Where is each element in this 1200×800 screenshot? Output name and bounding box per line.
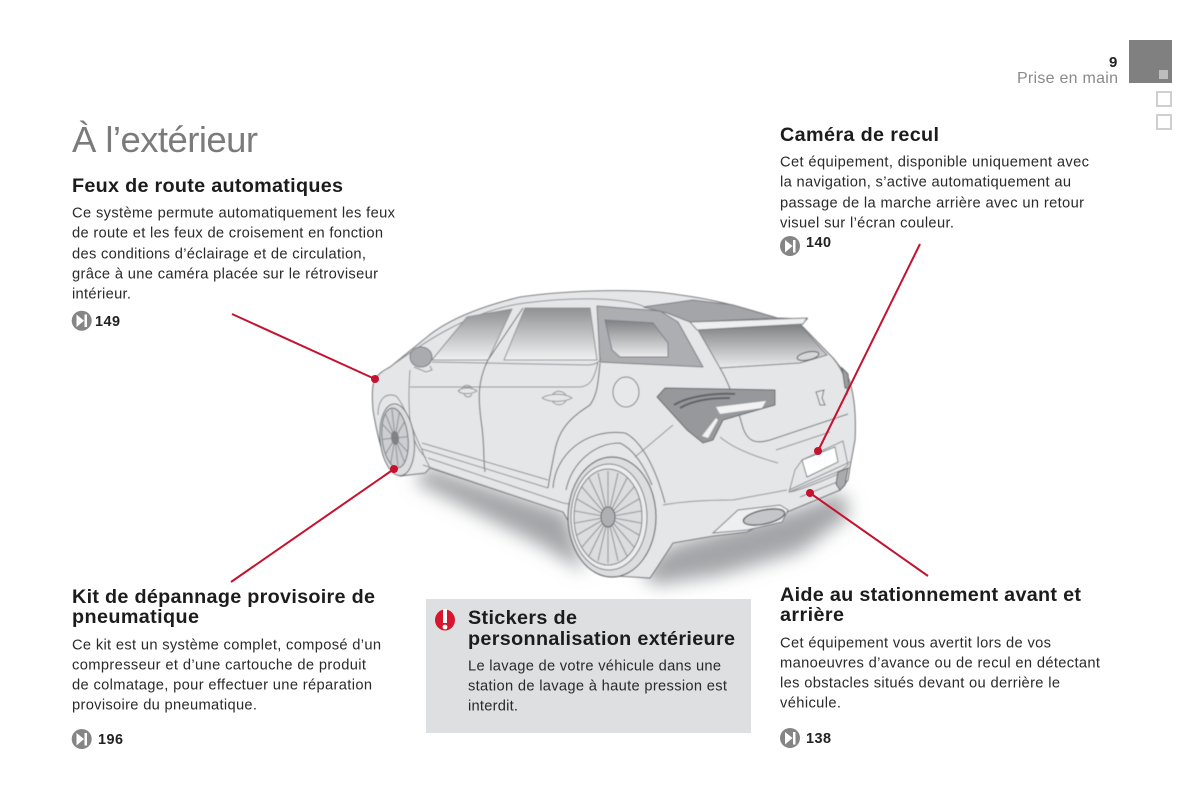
page reference 149: 149 bbox=[95, 314, 120, 330]
text block: Caméra de recul bbox=[780, 124, 1089, 232]
panel: stickers warning: personnalisation extérieure bbox=[468, 628, 735, 650]
callout line: front tyre bbox=[231, 465, 398, 582]
text block: Kit de dépannage: provisoire du pneumatique. bbox=[72, 698, 257, 714]
lower bumper bbox=[789, 462, 850, 497]
license plate area bbox=[789, 441, 848, 492]
panel: stickers warning: station de lavage à haute pression est bbox=[468, 679, 727, 695]
callout line: headlamp camera bbox=[232, 314, 379, 383]
rear window badge bbox=[796, 350, 820, 362]
roof dark panel bbox=[643, 300, 777, 322]
spoiler bbox=[690, 318, 807, 330]
door gaps bbox=[479, 308, 600, 488]
rear wheel bbox=[568, 457, 656, 577]
text block: Kit de dépannage bbox=[72, 586, 381, 714]
roof edge bbox=[390, 299, 643, 367]
text block: Caméra de recul: visuel sur l’écran couleur. bbox=[780, 216, 954, 232]
door handles bbox=[458, 385, 572, 405]
text block: Feux de route automatiques: grâce à une caméra placée sur le rétroviseur bbox=[72, 267, 378, 283]
text block: Feux de route automatiques: intérieur. bbox=[72, 287, 131, 303]
text block: Aide au stationnement: les obstacles situés devant ou derrière le bbox=[780, 676, 1060, 692]
text block: Kit de dépannage: pneumatique bbox=[72, 606, 199, 628]
text block: Aide au stationnement: manoeuvres d’avance ou de recul en détectant bbox=[780, 656, 1100, 672]
text block: Feux de route automatiques: Feux de route automatiques bbox=[72, 175, 343, 197]
text block: Aide au stationnement: Cet équipement vous avertit lors de vos bbox=[780, 636, 1051, 652]
text block: Aide au stationnement: Aide au stationnement avant et bbox=[780, 584, 1081, 606]
page number: 9 bbox=[1109, 54, 1117, 71]
callout line: parking sensor bbox=[806, 489, 928, 576]
fuel door bbox=[613, 377, 639, 407]
page header bbox=[1017, 54, 1118, 87]
panel: stickers warning bbox=[426, 599, 751, 733]
brand logo bbox=[816, 390, 825, 405]
text block: Aide au stationnement: véhicule. bbox=[780, 696, 841, 712]
front door window bbox=[432, 309, 512, 360]
exhaust bbox=[713, 505, 788, 533]
text block: Kit de dépannage: Kit de dépannage provisoire de bbox=[72, 586, 375, 608]
text block: Feux de route automatiques: des conditions d’éclairage et de circulation, bbox=[72, 247, 366, 263]
rear window bbox=[698, 325, 827, 368]
page reference 138: 138 bbox=[806, 731, 831, 747]
title: À l’extérieur bbox=[72, 119, 258, 160]
text block: Kit de dépannage: compresseur et d’une cartouche de produit bbox=[72, 658, 366, 674]
body lines bbox=[409, 358, 601, 458]
icon: warning bbox=[435, 609, 455, 630]
text block: Kit de dépannage: de colmatage, pour effectuer une réparation bbox=[72, 678, 372, 694]
quarter window bbox=[605, 320, 668, 357]
panel: stickers warning: interdit. bbox=[468, 699, 518, 715]
callout line: reversing camera bbox=[814, 244, 920, 455]
text block: Aide au stationnement: arrière bbox=[780, 604, 844, 626]
page reference 149 bbox=[72, 311, 120, 331]
front wheel bbox=[377, 402, 418, 477]
rear door window bbox=[504, 308, 597, 360]
panel: stickers warning: Le lavage de votre véhicule dans une bbox=[468, 659, 721, 675]
tailgate outline bbox=[720, 358, 848, 442]
rear arch bbox=[553, 432, 665, 503]
text block: Caméra de recul: passage de la marche arrière avec un retour bbox=[780, 196, 1084, 212]
text block: Caméra de recul: Caméra de recul bbox=[780, 124, 939, 146]
text block: Feux de route automatiques bbox=[72, 175, 396, 303]
text block: Caméra de recul: Cet équipement, disponible uniquement avec bbox=[780, 155, 1089, 171]
text block: Caméra de recul: la navigation, s’active automatiquement au bbox=[780, 175, 1071, 191]
creases bbox=[635, 425, 850, 505]
page reference 140 bbox=[780, 235, 831, 256]
front arch bbox=[378, 395, 430, 468]
right tail lamp edge bbox=[842, 368, 849, 388]
car illustration bbox=[372, 291, 855, 585]
window pillar surround bbox=[597, 306, 703, 367]
sills bbox=[422, 443, 575, 512]
mirror bbox=[410, 347, 432, 372]
text block: Aide au stationnement bbox=[780, 584, 1100, 712]
section name: Prise en main bbox=[1017, 70, 1118, 87]
page reference 140: 140 bbox=[806, 235, 831, 251]
page reference 196 bbox=[72, 729, 123, 749]
license plate bbox=[802, 447, 838, 477]
section navigation squares bbox=[1129, 40, 1172, 129]
text block: Feux de route automatiques: Ce système permute automatiquement les feux bbox=[72, 206, 396, 222]
ground shadow bbox=[415, 466, 850, 585]
text block: Kit de dépannage: Ce kit est un système complet, composé d’un bbox=[72, 638, 381, 654]
panel: stickers warning: Stickers de bbox=[468, 607, 577, 629]
page reference 196: 196 bbox=[98, 732, 123, 748]
page reference 138 bbox=[780, 728, 831, 748]
text block: Feux de route automatiques: de route et les feux de croisement en fonction bbox=[72, 226, 383, 242]
car body bbox=[372, 291, 855, 578]
tail lamp bbox=[657, 388, 775, 443]
